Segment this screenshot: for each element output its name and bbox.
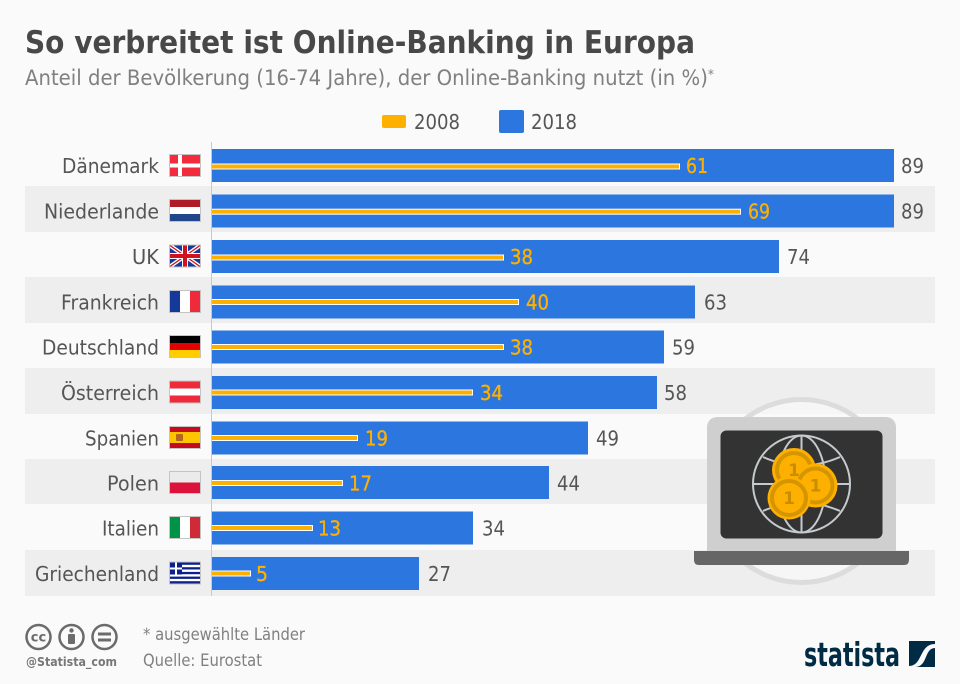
row: Österreich: 34 (480, 381, 503, 405)
row: Polen: 44 (557, 472, 580, 496)
row: Niederlande: 89 (901, 200, 924, 224)
icon: laptop with globe and coins (694, 400, 909, 582)
row: Frankreich: 40 (526, 290, 549, 314)
legend (382, 110, 577, 134)
row: Österreich: 58 (664, 381, 687, 405)
row: UK: UK (132, 245, 160, 269)
row: Spanien: 19 (365, 426, 388, 450)
legend: 2008 (414, 110, 460, 134)
row: Italien: 34 (482, 516, 505, 540)
row: UK: 74 (787, 245, 810, 269)
footnote: * ausgewählte Länder (143, 625, 305, 644)
row: Deutschland: 59 (672, 336, 695, 360)
row: Polen (107, 466, 580, 499)
row: Polen: Polen (107, 472, 159, 496)
row: Österreich (61, 376, 687, 409)
subtitle: * (708, 68, 714, 83)
row stripes (25, 186, 935, 596)
row: Griechenland (35, 557, 451, 590)
row: Frankreich: 63 (704, 290, 727, 314)
source: Quelle: Eurostat (143, 651, 262, 670)
row: Italien: 13 (318, 516, 341, 540)
row: Dänemark: 61 (686, 154, 708, 178)
row: UK: 38 (510, 245, 533, 269)
icon: creative commons badges (26, 625, 116, 649)
row: Österreich: Österreich (61, 380, 159, 405)
title: So verbreitet ist Online-Banking in Europa (25, 25, 695, 61)
axis line (211, 142, 212, 596)
row: Spanien (85, 422, 619, 454)
icon: laptop with globe and coins: 1 (788, 461, 800, 481)
row: Dänemark: Dänemark (62, 154, 159, 178)
row: Frankreich: Frankreich (61, 290, 159, 314)
icon: laptop with globe and coins: 1 (783, 489, 795, 509)
row: Deutschland (42, 330, 695, 364)
row: Frankreich (61, 286, 727, 318)
icon: laptop with globe and coins: 1 (810, 476, 821, 496)
row: Deutschland: Deutschland (42, 336, 159, 360)
row: Deutschland: 38 (510, 336, 533, 360)
row: Italien (102, 512, 505, 544)
row: Griechenland: 5 (256, 562, 268, 586)
statista logo: statista (804, 635, 900, 674)
row: Spanien: Spanien (85, 426, 159, 450)
row: Polen: 17 (349, 472, 372, 496)
row: Niederlande (44, 194, 924, 228)
row: Dänemark: 89 (901, 154, 924, 178)
row: Dänemark (62, 149, 924, 182)
row: Italien: Italien (102, 516, 159, 540)
row: Griechenland: 27 (428, 562, 451, 586)
row: UK (132, 240, 810, 273)
icon: creative commons badges: cc (31, 630, 46, 646)
subtitle: Anteil der Bevölkerung (16-74 Jahre), der Online-Banking nutzt (in %) (25, 66, 754, 90)
row: Niederlande: 69 (748, 200, 770, 224)
row: Niederlande: Niederlande (44, 200, 159, 224)
handle: @Statista_com (26, 655, 117, 670)
row: Spanien: 49 (596, 426, 619, 450)
row: Griechenland: Griechenland (35, 562, 159, 586)
legend: 2018 (531, 110, 577, 134)
